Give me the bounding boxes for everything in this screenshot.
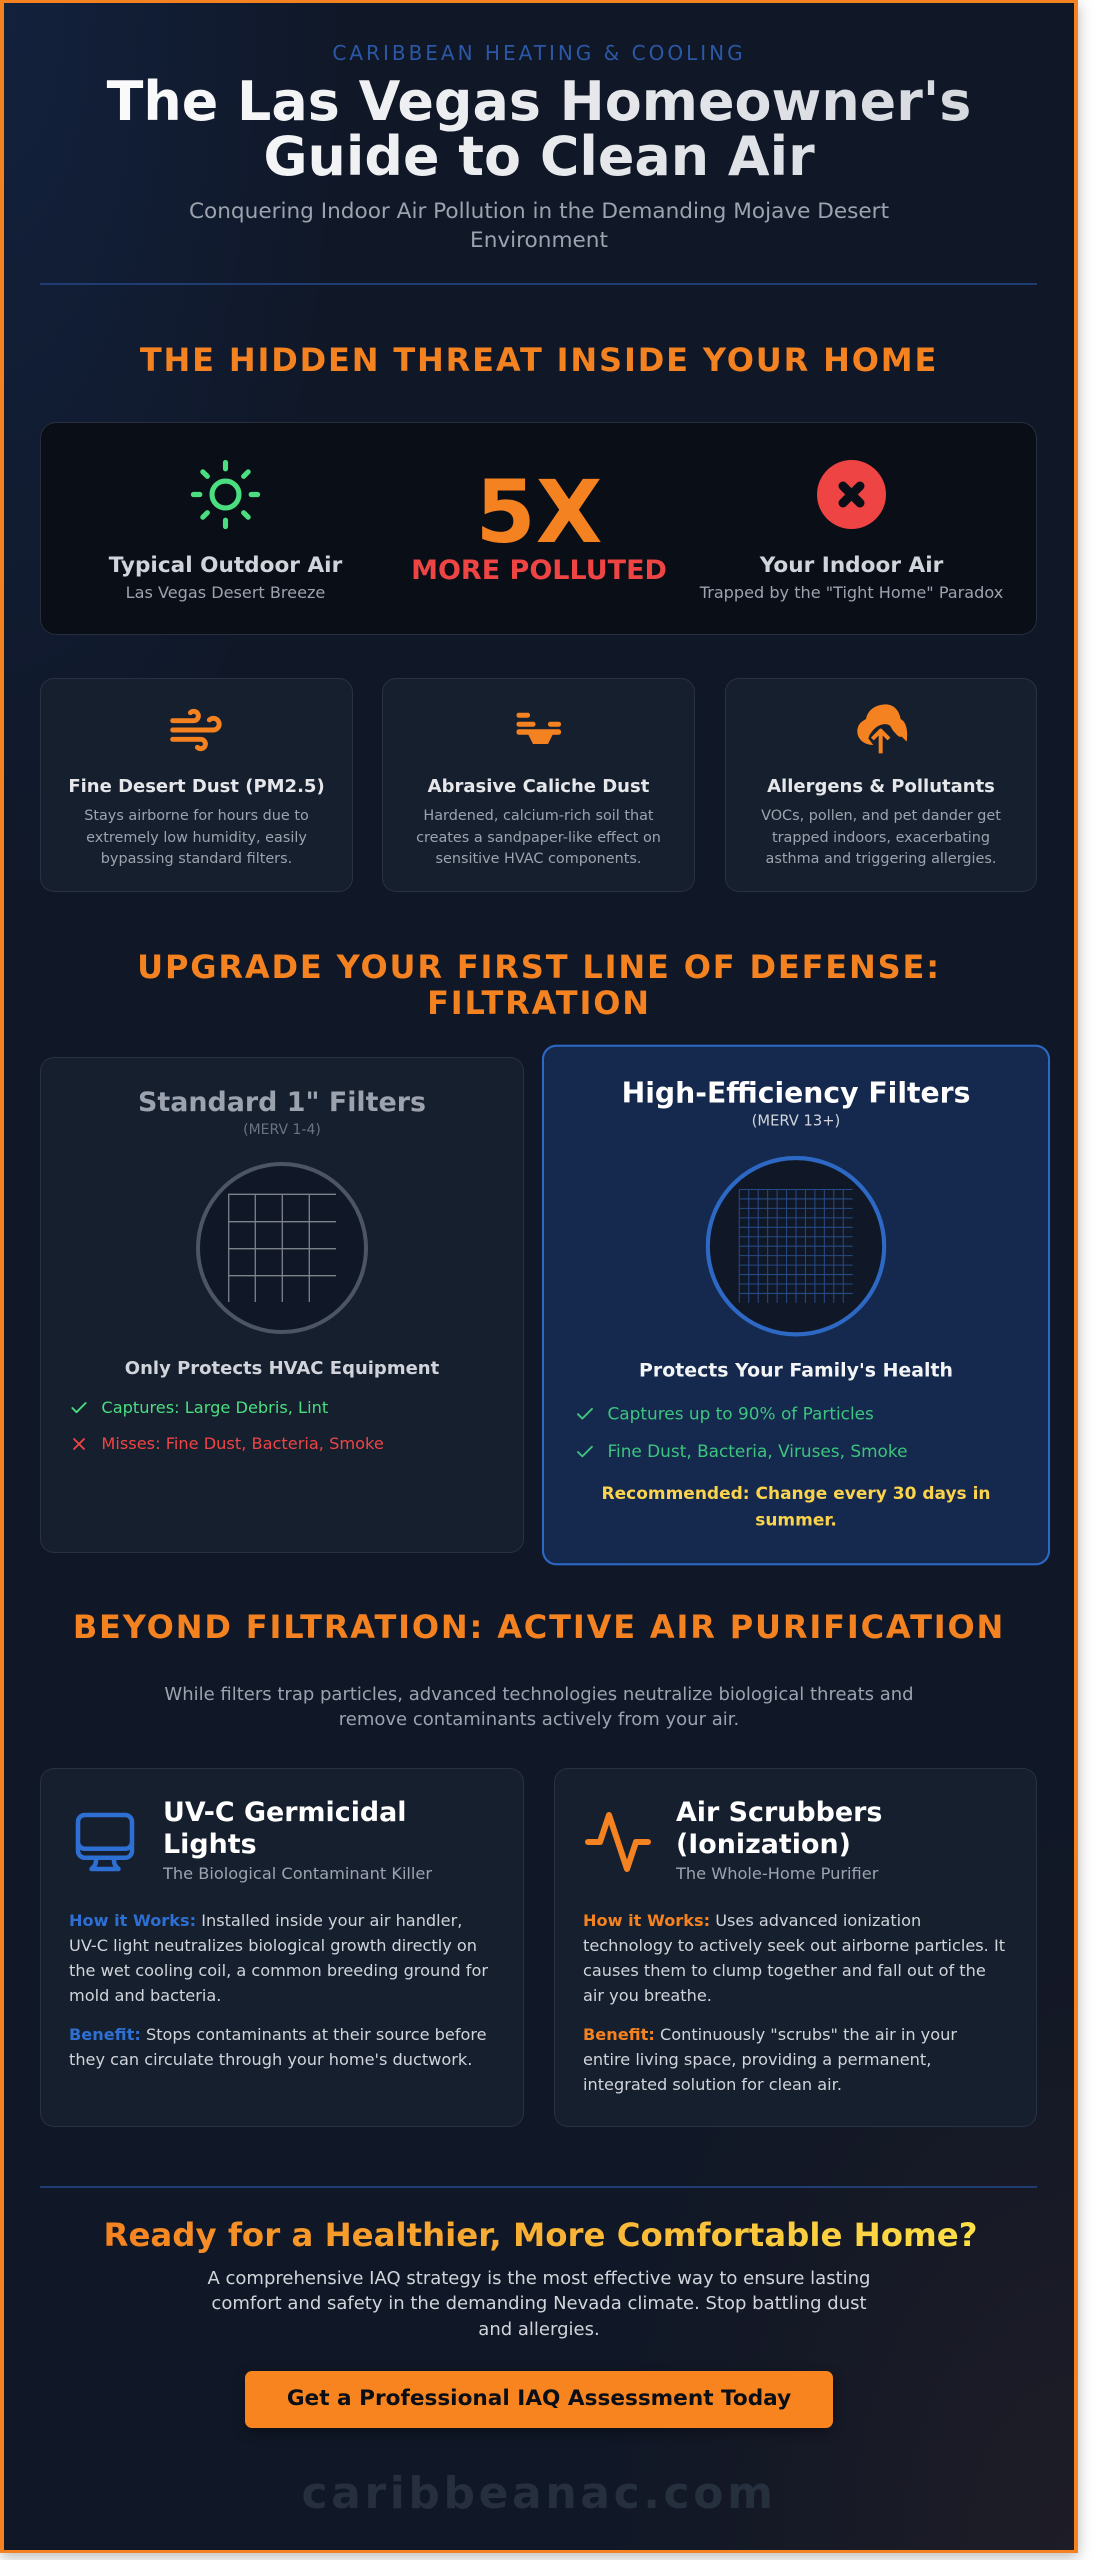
air scrubbers title: (Ionization) [676, 1829, 851, 1860]
benefit: Benefit: Continuously "scrubs" the air in your [583, 2025, 957, 2044]
misses text: Misses: Fine Dust, Bacteria, Smoke [101, 1434, 384, 1453]
main title: Guide to Clean Air [263, 125, 815, 188]
uv-c title: UV-C Germicidal [163, 1796, 407, 1828]
contaminant row [577, 1440, 907, 1460]
icon: red x circle [817, 460, 886, 529]
contaminant text: Fine Dust, Bacteria, Viruses, Smoke [607, 1440, 907, 1460]
icon: check [577, 1446, 593, 1458]
panel: high-efficiency filters [541, 1044, 1050, 1565]
subtitle [189, 199, 889, 253]
uv-c title: Lights [163, 1829, 257, 1860]
main title [0, 74, 1078, 184]
merv rating: (MERV 13+) [751, 1112, 840, 1129]
cta button: Get a Professional IAQ Assessment Today [287, 2386, 791, 2411]
recommendation: Recommended: Change every 30 days in [601, 1483, 990, 1503]
heading: hidden threat: THE HIDDEN THREAT INSIDE YOUR HOME [140, 341, 938, 379]
how it works: How it Works: Installed inside your air handler, [69, 1910, 462, 1930]
cta text: comfort and safety in the demanding Nevada climate. Stop battling dust [211, 2293, 867, 2314]
captures text: Captures: Large Debris, Lint [101, 1398, 328, 1417]
call to action [104, 2216, 978, 2519]
benefit: integrated solution for clean air. [583, 2075, 842, 2094]
website watermark: caribbeanac.com [301, 2468, 777, 2519]
indoor air column [700, 460, 1003, 602]
indoor label: Your Indoor Air [760, 553, 943, 578]
cta heading: Ready for a Healthier, More Comfortable Home? [104, 2216, 978, 2254]
icon: cross [73, 1438, 85, 1450]
intro text [164, 1684, 914, 1730]
card: allergens [725, 678, 1037, 892]
card: fine desert dust [40, 678, 353, 892]
benefit [583, 2025, 957, 2094]
center statistic [411, 463, 667, 586]
card description: Stays airborne for hours due to [84, 808, 309, 824]
cta text: and allergies. [478, 2319, 600, 2340]
misses row [73, 1434, 384, 1453]
benefit: they can circulate through your home's ductwork. [69, 2050, 472, 2069]
heading: active purification: BEYOND FILTRATION: ACTIVE AIR PURIFICATION [73, 1608, 1005, 1646]
subtitle: Conquering Indoor Air Pollution in the Demanding Mojave Desert [189, 199, 889, 224]
card description: Hardened, calcium-rich soil that [423, 808, 654, 824]
card title: Fine Desert Dust (PM2.5) [68, 776, 325, 796]
card description: extremely low humidity, easily [86, 830, 307, 846]
outdoor sublabel: Las Vegas Desert Breeze [126, 583, 325, 602]
icon: check [577, 1408, 593, 1420]
brand label: CARIBBEAN HEATING & COOLING [332, 41, 746, 65]
intro text: remove contaminants actively from your air. [339, 1709, 739, 1730]
subtitle: Environment [470, 228, 608, 253]
how it works: the wet cooling coil, a common breeding ground for [69, 1960, 488, 1980]
air scrubbers title: Air Scrubbers [676, 1796, 882, 1828]
high-efficiency title: High-Efficiency Filters [621, 1077, 970, 1109]
heading: filtration: FILTRATION [427, 984, 651, 1022]
card description [84, 808, 309, 867]
standard title: Standard 1" Filters [138, 1087, 426, 1118]
main title: The Las Vegas Homeowner's [107, 70, 971, 133]
card description [416, 808, 661, 867]
uv-c subtitle: The Biological Contaminant Killer [163, 1864, 432, 1883]
card description: trapped indoors, exacerbating [772, 830, 990, 846]
outdoor air column [108, 460, 342, 602]
how it works [583, 1910, 1005, 2004]
recommendation: summer. [755, 1509, 836, 1529]
panel: 5X comparison [40, 422, 1037, 635]
particle row [577, 1403, 873, 1423]
icon: sun [190, 460, 260, 530]
indoor sublabel: Trapped by the "Tight Home" Paradox [700, 583, 1003, 602]
card: caliche dust [382, 678, 695, 892]
diagram: coarse filter mesh [196, 1162, 368, 1334]
benefit: Benefit: Stops contaminants at their source before [69, 2025, 487, 2044]
icon: check [71, 1402, 87, 1414]
air scrubbers title [676, 1796, 882, 1860]
outdoor label: Typical Outdoor Air [109, 553, 342, 578]
panel: uv-c lights [40, 1768, 524, 2127]
standard summary: Only Protects HVAC Equipment [125, 1358, 439, 1379]
how it works [69, 1910, 488, 2004]
recommendation [601, 1483, 990, 1529]
particle text: Captures up to 90% of Particles [607, 1403, 873, 1423]
intro text: While filters trap particles, advanced technologies neutralize biological threats and [164, 1684, 914, 1705]
more polluted: MORE POLLUTED [411, 555, 667, 586]
icon: activity pulse [585, 1812, 651, 1872]
diagram: fine filter mesh [706, 1156, 886, 1336]
card description [761, 808, 1001, 867]
card title: Allergens & Pollutants [767, 776, 995, 796]
card description: bypassing standard filters. [101, 851, 292, 867]
heading: filtration [137, 948, 941, 1022]
cta text [207, 2268, 870, 2340]
panel: standard filters [40, 1057, 524, 1553]
merv rating: (MERV 1-4) [243, 1122, 321, 1138]
cta text: A comprehensive IAQ strategy is the most effective way to ensure lasting [207, 2268, 870, 2289]
card title: Abrasive Caliche Dust [428, 776, 649, 796]
icon: wind [170, 708, 222, 752]
card description: sensitive HVAC components. [436, 851, 642, 867]
how it works: UV-C light neutralizes biological growth directly on [69, 1936, 477, 1954]
5X number: 5X [476, 463, 602, 563]
card description: asthma and triggering allergies. [766, 851, 996, 867]
card description: VOCs, pollen, and pet dander get [761, 808, 1001, 824]
how it works: technology to actively seek out airborne particles. It [583, 1936, 1005, 1954]
panel: air scrubbers [554, 1768, 1037, 2127]
heading: filtration: UPGRADE YOUR FIRST LINE OF DEFENSE: [137, 948, 941, 986]
high-efficiency summary: Protects Your Family's Health [639, 1359, 952, 1381]
benefit: entire living space, providing a permanent, [583, 2050, 931, 2069]
how it works: mold and bacteria. [69, 1986, 221, 2004]
how it works: air you breathe. [583, 1986, 712, 2004]
benefit [69, 2025, 487, 2069]
how it works: causes them to clump together and fall out of the [583, 1960, 986, 1980]
header [106, 41, 971, 253]
icon: caliche [516, 712, 561, 744]
uv-c title [163, 1796, 407, 1860]
cta button [245, 2371, 833, 2428]
icon: cloud with arrow [857, 704, 908, 754]
how it works: How it Works: Uses advanced ionization [583, 1910, 921, 1930]
icon: monitor [76, 1812, 134, 1872]
air scrubbers subtitle: The Whole-Home Purifier [676, 1864, 878, 1883]
captures row [71, 1398, 328, 1417]
card description: creates a sandpaper-like effect on [416, 830, 661, 846]
